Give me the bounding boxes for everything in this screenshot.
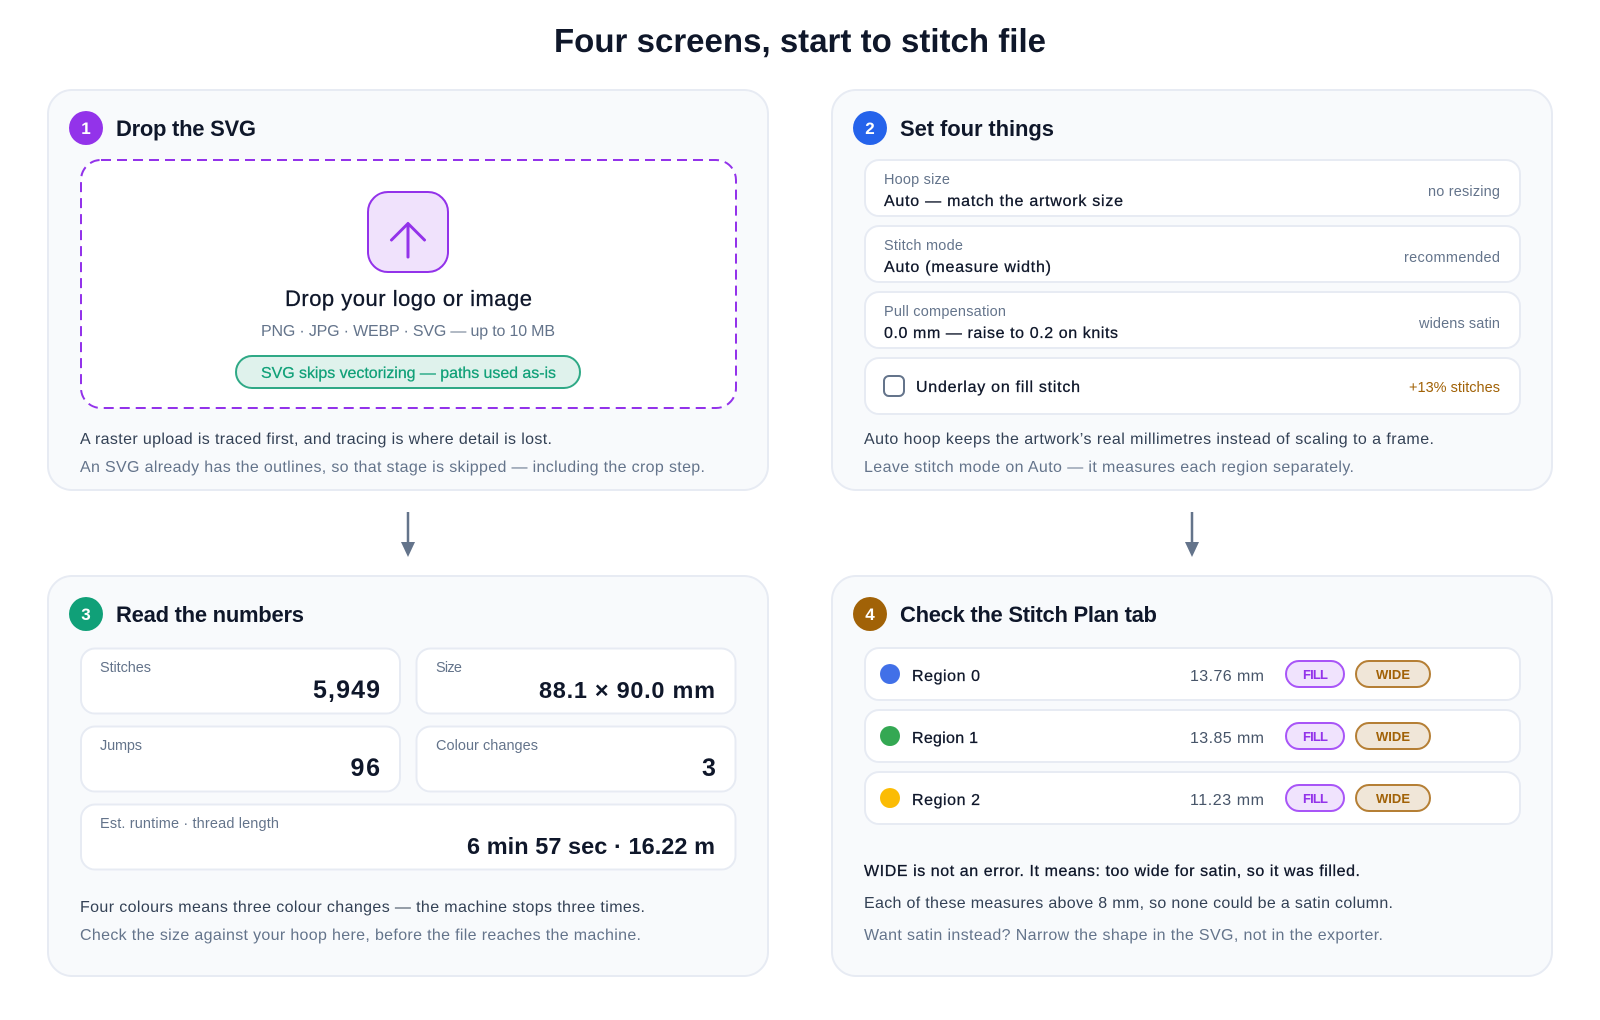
setting: stitch mode: Stitch mode [884, 238, 963, 254]
step 1 badge: 1 [81, 119, 91, 138]
region row 1: 13.85 mm [1190, 730, 1264, 747]
setting: stitch mode: recommended [1404, 250, 1500, 266]
stat: runtime and thread length: Est. runtime · thread length [100, 816, 279, 832]
step 3 badge [69, 597, 103, 631]
step 1 badge [69, 111, 103, 145]
step 2 explanation [864, 431, 1434, 476]
step 3 badge: 3 [81, 605, 91, 624]
setting: pull compensation [865, 292, 1520, 348]
accepted formats: PNG · JPG · WEBP · SVG — up to 10 MB [261, 323, 555, 340]
step 2 explanation: Auto hoop keeps the artwork’s real millimetres instead of scaling to a frame. [864, 431, 1434, 448]
setting: pull compensation: widens satin [1418, 316, 1500, 332]
step 4 badge: 4 [865, 605, 875, 624]
step 4 explanation: WIDE is not an error. It means: too wide for satin, so it was filled. [864, 863, 1360, 880]
stat: size: 88.1 × 90.0 mm [539, 677, 715, 703]
region row 2: Region 2 [912, 792, 980, 809]
setting: pull compensation: Pull compensation [884, 304, 1006, 320]
stat: runtime and thread length [81, 804, 736, 870]
setting: hoop size: Hoop size [884, 172, 950, 188]
icon: upload arrow [368, 192, 448, 272]
arrow: step 2 to step 4 [1185, 512, 1199, 557]
title: Four screens, start to stitch file [554, 22, 1046, 59]
region row 0: FILL [1303, 667, 1328, 682]
step 1 explanation: An SVG already has the outlines, so that stage is skipped — including the crop step. [80, 459, 705, 476]
stat: size: Size [436, 660, 462, 676]
step 4 badge [853, 597, 887, 631]
region row 2: 11.23 mm [1190, 792, 1264, 809]
step 3 explanation: Four colours means three colour changes — the machine stops three times. [80, 899, 645, 916]
step 2 explanation: Leave stitch mode on Auto — it measures each region separately. [864, 459, 1354, 476]
arrow: step 1 to step 3 [401, 512, 415, 557]
step 4 explanation: Each of these measures above 8 mm, so none could be a satin column. [864, 895, 1393, 912]
region row 0: WIDE [1376, 667, 1410, 682]
region row 1: Region 1 [912, 730, 978, 747]
region row 1 [865, 710, 1520, 762]
region row 2: FILL [1303, 791, 1328, 806]
region row 1: WIDE [1376, 729, 1410, 744]
step 2 badge: 2 [865, 119, 875, 138]
step 3 explanation [80, 899, 645, 944]
stat: colour changes [416, 726, 736, 792]
stitch increase note: +13% stitches [1409, 380, 1500, 396]
drop zone heading: Drop your logo or image [285, 286, 532, 311]
step 4 explanation: Want satin instead? Narrow the shape in the SVG, not in the exporter. [864, 927, 1383, 944]
setting: pull compensation: 0.0 mm — raise to 0.2 on knits [884, 325, 1118, 342]
green callout pill [236, 356, 580, 388]
setting: stitch mode: Auto (measure width) [884, 259, 1051, 276]
icon: empty checkbox [884, 376, 904, 396]
stat: stitches: Stitches [100, 660, 151, 676]
step 4 heading: Check the Stitch Plan tab [900, 602, 1157, 627]
step 1 explanation: A raster upload is traced first, and tracing is where detail is lost. [80, 431, 552, 448]
stat: jumps [81, 726, 400, 792]
panel: step 4 check the stitch plan tab [832, 576, 1552, 976]
step 3 explanation: Check the size against your hoop here, before the file reaches the machine. [80, 927, 641, 944]
dashed drop zone [81, 160, 736, 408]
region row 1: FILL [1303, 729, 1328, 744]
panel: step 2 set four things [832, 90, 1552, 490]
stat: jumps: Jumps [100, 738, 142, 754]
green callout pill: SVG skips vectorizing — paths used as-is [261, 365, 556, 382]
region row 0: Region 0 [912, 668, 980, 685]
stat: runtime and thread length: 6 min 57 sec · 16.22 m [467, 833, 715, 859]
stat: colour changes: Colour changes [436, 738, 538, 754]
stat: colour changes: 3 [702, 754, 716, 782]
setting: hoop size: Auto — match the artwork size [884, 193, 1123, 210]
step 2 heading: Set four things [900, 116, 1054, 141]
step 4 explanation [864, 863, 1393, 944]
setting: hoop size: no resizing [1428, 184, 1500, 200]
step 1 heading: Drop the SVG [116, 116, 256, 141]
region row 0: 13.76 mm [1190, 668, 1264, 685]
stat: stitches: 5,949 [313, 676, 380, 704]
underlay label: Underlay on fill stitch [916, 379, 1080, 396]
step 1 explanation [80, 431, 705, 476]
step 2 badge [853, 111, 887, 145]
setting: underlay checkbox [865, 358, 1520, 414]
step 3 heading: Read the numbers [116, 602, 304, 627]
setting: hoop size [865, 160, 1520, 216]
stat: stitches [81, 648, 400, 714]
region row 2: WIDE [1376, 791, 1410, 806]
stat: size [416, 648, 736, 714]
panel: step 1 drop the SVG [48, 90, 768, 490]
stat: jumps: 96 [350, 754, 380, 782]
region row 2 [865, 772, 1520, 824]
region row 0 [865, 648, 1520, 700]
setting: stitch mode [865, 226, 1520, 282]
panel: step 3 read the numbers [48, 576, 768, 976]
